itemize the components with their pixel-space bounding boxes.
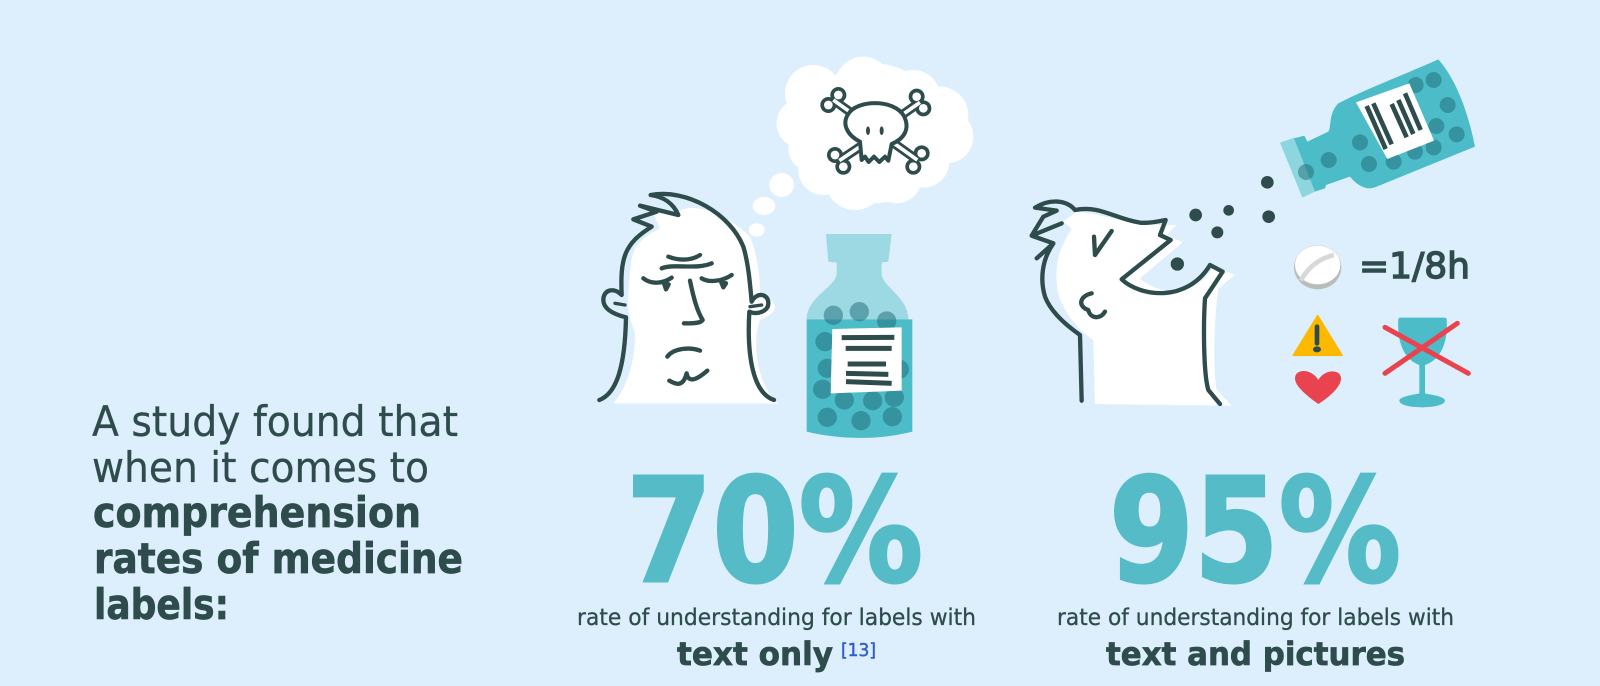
text-only medicine bottle bbox=[807, 234, 912, 438]
caption: text only: [13] bbox=[841, 640, 876, 661]
illustration: person taking medicine with picture-label bottle bbox=[1032, 176, 1275, 406]
icon: heart bbox=[1295, 371, 1341, 404]
heading: study intro: comprehension bbox=[93, 488, 421, 537]
thought cloud with skull bbox=[749, 57, 973, 237]
illustration: confused person with text-only bottle bbox=[599, 57, 973, 438]
icon: pill bbox=[1294, 245, 1341, 289]
pictorial icons group bbox=[1280, 59, 1475, 407]
icon: crossed out wine glass bbox=[1385, 318, 1468, 407]
icon: warning triangle bbox=[1293, 316, 1342, 355]
caption: text and pictures: text and pictures bbox=[1106, 635, 1405, 673]
heading: study intro bbox=[92, 397, 463, 629]
caption: text only: rate of understanding for labels with bbox=[577, 605, 976, 631]
heading: study intro: A study found that bbox=[92, 397, 458, 446]
person head, worried bbox=[599, 194, 778, 403]
stat: 70%: 70% bbox=[626, 447, 923, 615]
text label on bottle bbox=[831, 327, 902, 393]
heading: study intro: when it comes to bbox=[92, 443, 429, 492]
caption: text and pictures bbox=[1057, 605, 1454, 673]
caption: text only: text only bbox=[677, 635, 833, 673]
heading: study intro: rates of medicine bbox=[94, 534, 463, 583]
stat: 95%: 95% bbox=[1109, 447, 1401, 615]
person swallowing pills bbox=[1032, 176, 1275, 406]
tilted bottle with barcode label bbox=[1280, 59, 1475, 198]
icon: skull and crossbones bbox=[820, 87, 931, 175]
caption: text and pictures: rate of understanding for labels with bbox=[1057, 605, 1454, 631]
caption: text only bbox=[577, 605, 976, 673]
dosage text: =1/8h bbox=[1359, 246, 1470, 287]
heading: study intro: labels: bbox=[94, 580, 229, 629]
